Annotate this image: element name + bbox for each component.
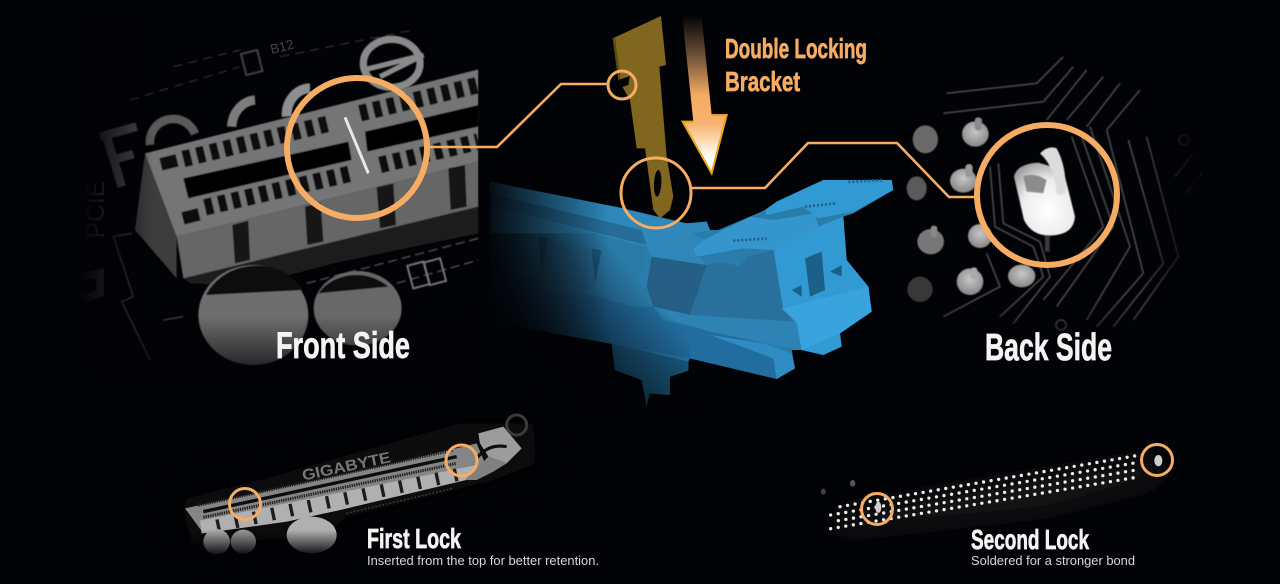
label: back side: Back Side [985,327,1112,369]
circle: bracket hook [608,71,636,99]
glow [833,462,1170,530]
panel: front side photo [80,30,478,390]
label: front side: Front Side [276,325,410,366]
heading: double locking bracket: Double Locking [725,33,867,64]
circle: bracket tip [621,158,691,228]
panel: second lock photo [821,455,1170,530]
solder pads [907,117,1035,302]
circles: first lock [230,445,477,520]
panel: blue connector latch [490,16,893,410]
panel: first lock photo [180,415,537,557]
PCB backdrop [180,423,537,547]
latch grip ridges [733,180,883,241]
circle: front side [287,78,427,218]
text: first lock [367,523,599,568]
panel: back side photo [900,57,1200,380]
circles: second lock [862,444,1172,524]
PCIe slot connector [135,69,478,287]
bracket pin [345,117,368,173]
GIGABYTE silkscreen: GIGABYTE [301,449,392,485]
circle: back side [977,125,1117,265]
rail fade [490,167,690,410]
text: second lock: Second Lock [971,524,1089,555]
gold bracket [613,16,673,218]
PCB silkscreen markings [80,30,478,360]
heading: double locking bracket: Bracket [725,66,800,97]
heading: double locking bracket [725,33,867,97]
text: first lock: First Lock [367,523,461,554]
connector body [490,180,893,406]
silkscreen label B12: B12 [269,37,295,57]
solder dot matrix [831,455,1140,529]
leader line: bracket to back side [692,143,975,197]
callout lines and circles [287,71,1117,265]
soldered pins [821,455,1162,513]
text: first lock: Inserted from the top for better retention. [367,553,599,568]
leader line: front side to bracket [428,84,609,147]
slot body [185,415,527,554]
arrow [682,17,727,173]
text: second lock: Soldered for a stronger bond [971,553,1135,568]
silkscreen label PCIE: PCIE [83,181,110,238]
text: second lock [971,524,1135,568]
circuit traces [943,57,1200,330]
capacitors [198,265,402,365]
zoomed solder joint [1014,147,1075,252]
